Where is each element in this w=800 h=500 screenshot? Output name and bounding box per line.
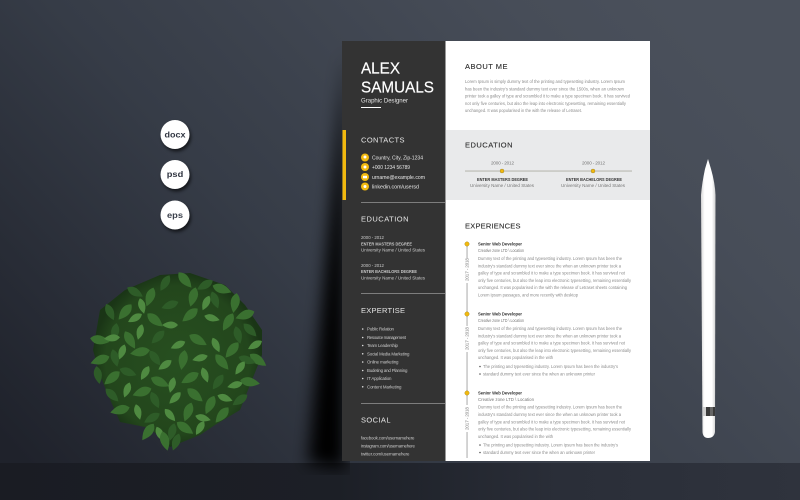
experience entry 3: galley of type and scrambled it to make a type specimen book. It has survived not [478, 419, 626, 424]
experience entry 2: The printing and typesetting industry. Lorem Ipsum has been the industry's [483, 364, 619, 369]
education timeline: University Name / United States [470, 183, 535, 188]
heading: expertise: EXPERTISE [361, 306, 405, 315]
experience entry 3 [478, 391, 632, 455]
expertise list: Online marketing [367, 360, 399, 365]
experience timeline: 2017 - 2018 [465, 327, 470, 350]
section: about me [465, 62, 631, 113]
contact list [361, 154, 425, 190]
experience entry 3: industry's standard dummy text ever since the when an unknown printer took a [478, 412, 622, 417]
experience timeline: 2017 - 2018 [465, 258, 470, 281]
experience entry 1: industry's standard dummy text ever since the when an unknown printer took a [478, 263, 622, 268]
yellow accent bar [342, 130, 346, 200]
education timeline [465, 161, 632, 188]
expertise list [362, 327, 410, 390]
about paragraph: not only five centuries, but also the leap into electronic typesetting, remaining essentially [465, 101, 627, 106]
icon: stylus pencil [701, 159, 716, 438]
expertise list: Resource management [367, 335, 407, 340]
experience entry 3: only five centuries, but also the leap into electronic typesetting, remaining essentially [478, 427, 632, 432]
expertise list: Budeting and Planning [367, 368, 408, 373]
education entries: 2000 - 2012 [361, 235, 385, 240]
education entries [361, 235, 426, 280]
education entries: ENTER BACHELORS DEGREE [361, 269, 417, 274]
section: experiences [465, 222, 632, 458]
experience entry 2: industry's standard dummy text ever since the when an unknown printer took a [478, 333, 622, 338]
badge: docx: docx [164, 129, 186, 139]
education timeline: 2000 - 2012 [582, 161, 605, 166]
experience entry 2: Dummy text of the printing and typesetting industry. Lorem Ipsum has been the [478, 326, 623, 331]
about paragraph [465, 79, 631, 113]
experience entry 2: Senior Web Developer [478, 312, 522, 317]
education entries: University Name / United States [361, 275, 426, 280]
experience entry 1: Senior Web Developer [478, 242, 522, 247]
section: education band [446, 130, 650, 200]
heading: contacts: CONTACTS [361, 135, 404, 144]
icon: plant [89, 269, 269, 452]
experience entry 2: galley of type and scrambled it to make a type specimen book. It has survived not [478, 341, 626, 346]
heading: education: EDUCATION [465, 140, 512, 150]
contact: phone: +000 1234 56789 [372, 165, 410, 171]
contact: linkedin: linkedin.com/usersd [372, 184, 419, 190]
experience entry 1: Dummy text of the printing and typesetting industry. Lorem Ipsum has been the [478, 256, 623, 261]
experience entry 2: unchanged. It was popularised in the with [478, 355, 554, 360]
badge: psd: psd [167, 169, 183, 179]
resume sheet [342, 41, 650, 461]
experience entry 1: galley of type and scrambled it to make a type specimen book. It has survived not [478, 271, 626, 276]
experience entry 1 [478, 242, 632, 298]
format badges [160, 120, 191, 232]
experience timeline: 2017 - 2018 [465, 407, 470, 430]
experience entry 1: Creative zone LTD \ Location [478, 248, 524, 253]
about paragraph: unchanged. It was popularised in the with the release of Letraset. [465, 108, 582, 113]
experience entry 2: only five centuries, but also the leap into electronic typesetting, remaining essentially [478, 348, 632, 353]
social links: twitter.com/usernamehere [361, 452, 410, 457]
job title: Graphic Designer [361, 98, 408, 104]
resume cast shadow [308, 50, 345, 470]
about paragraph: has been the industry's standard dummy text ever since the 1500s, when an unknown [465, 86, 625, 91]
experience entry 3: The printing and typesetting industry. Lorem Ipsum has been the industry's [483, 442, 619, 448]
expertise list: Content Marketing [367, 384, 402, 390]
about paragraph: printer took a galley of type and scrambled it to make a type specimen book. It has survived [465, 94, 631, 99]
heading: experiences: EXPERIENCES [465, 222, 520, 231]
experience entry 3: unchanged. It was popularised in the with [478, 434, 554, 439]
name: ALEX [361, 60, 400, 78]
contact: email: urname@example.com [372, 175, 425, 181]
heading: education: EDUCATION [361, 215, 408, 224]
education timeline: 2000 - 2012 [491, 161, 514, 166]
education entries: 2000 - 2012 [361, 263, 385, 268]
experience entry 3: Creative zone LTD \ Location [478, 397, 534, 402]
accent rule [361, 107, 381, 108]
education entries: University Name / United States [361, 247, 426, 252]
education timeline: ENTER BACHELORS DEGREE [566, 177, 622, 182]
expertise list: Social Media Marketing [367, 352, 410, 356]
panel: dark sidebar [342, 41, 446, 461]
experience timeline [465, 242, 470, 458]
expertise list: IT Application [367, 376, 392, 381]
experience entry 3: standard dummy text ever since the when an unknown printer [483, 450, 595, 455]
experience entry 3: Senior Web Developer [478, 391, 522, 396]
contact: address: Country, City, Zip-1234 [372, 155, 423, 161]
about paragraph: Lorem Ipsum is simply dummy text of the printing and typesetting industry. Lorem Ipsum [465, 79, 625, 84]
heading: about me: ABOUT ME [465, 62, 508, 71]
social links: facebook.com/usernamehere [361, 436, 415, 441]
expertise list: Public Relation [367, 327, 395, 332]
experience entry 2: Creative zone LTD \ Location [478, 318, 524, 323]
education entries: ENTER MASTERS DEGREE [361, 241, 412, 246]
name [361, 60, 434, 96]
experience entry 2: standard dummy text ever since the when an unknown printer [483, 372, 595, 376]
heading: social: SOCIAL [361, 416, 390, 425]
education timeline: University Name / United States [561, 183, 626, 188]
background floor [0, 463, 800, 500]
badge: eps: eps [167, 210, 183, 220]
experience entry 1: Lorem Ipsum passages, and more recently with desktop [478, 292, 578, 298]
education timeline: ENTER MASTERS DEGREE [477, 177, 528, 182]
expertise list: Team Leadership [367, 343, 399, 348]
experience entry 2 [478, 312, 632, 376]
name: SAMUALS [361, 80, 434, 96]
panel: main white [445, 41, 650, 461]
experience entry 1: unchanged. It was popularised in the with the release of Letraset sheets containing [478, 285, 628, 290]
social links: instagram.com/usernamehere [361, 444, 416, 449]
experience entry 3: Dummy text of the printing and typesetting industry. Lorem Ipsum has been the [478, 405, 623, 410]
social links [361, 436, 416, 457]
experience entry 1: only five centuries, but also the leap into electronic typesetting, remaining essentially [478, 278, 632, 283]
